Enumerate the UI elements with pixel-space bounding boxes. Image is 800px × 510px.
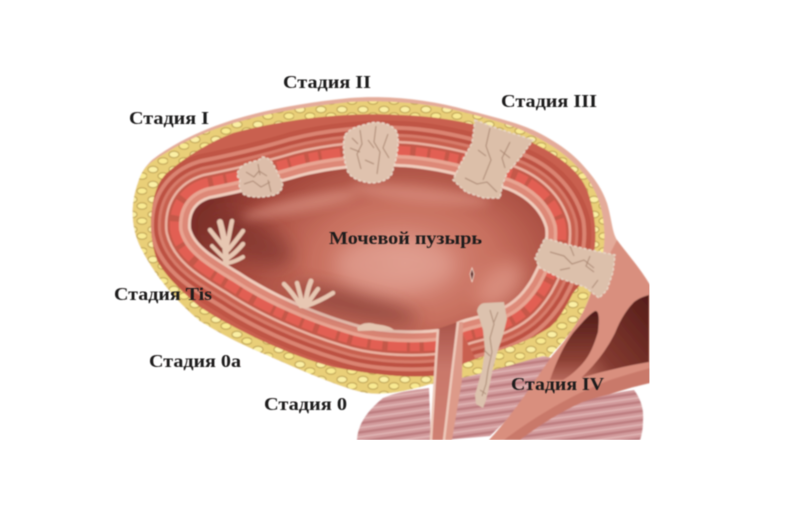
papilloma: stage 0a upper [210, 221, 243, 263]
label: stage 0a: Стадия 0a [149, 351, 241, 371]
fat layer [133, 101, 604, 394]
tumour: stage IV upper wall [535, 238, 615, 298]
lower pelvic tissue [357, 240, 650, 440]
urethra right wall [444, 322, 458, 440]
urethra backing wall [445, 322, 464, 440]
ureteral orifice [470, 268, 474, 282]
outer bladder serosa [142, 96, 618, 339]
tube walls [489, 240, 650, 440]
dark cavity one [550, 311, 599, 380]
detrusor muscle wall [151, 114, 595, 376]
illustration: bladder cross-section [133, 97, 650, 440]
label: stage 0: Стадия 0 [264, 394, 347, 414]
label: bladder: Мочевой пузырь [329, 228, 483, 248]
infographic: bladder cancer stages [114, 75, 650, 440]
carcinoma in situ: stage Tis [357, 323, 394, 331]
tube band [504, 368, 650, 440]
label: stage I: Стадия I [129, 108, 209, 128]
lumen shading [200, 180, 531, 333]
urethra channel [431, 322, 458, 440]
papilloma: stage 0a lower [284, 281, 333, 306]
label: stage IV: Стадия IV [511, 374, 604, 394]
tumour: stage II [344, 122, 398, 183]
prostate section right [520, 390, 643, 440]
tumour: stage III [453, 120, 533, 198]
label: stage Tis: Стадия Tis [114, 284, 212, 304]
bladder lumen [190, 166, 546, 331]
urethra left wall [431, 329, 438, 440]
prostate section middle [445, 356, 552, 440]
prostate section left [357, 388, 431, 440]
label: stage III: Стадия III [501, 91, 597, 111]
wall layers [191, 166, 545, 330]
tumour: stage I [237, 157, 282, 197]
label: stage II: Стадия II [283, 72, 371, 92]
dark cavity two [581, 295, 649, 378]
tumour: stage IV invading [475, 302, 507, 408]
